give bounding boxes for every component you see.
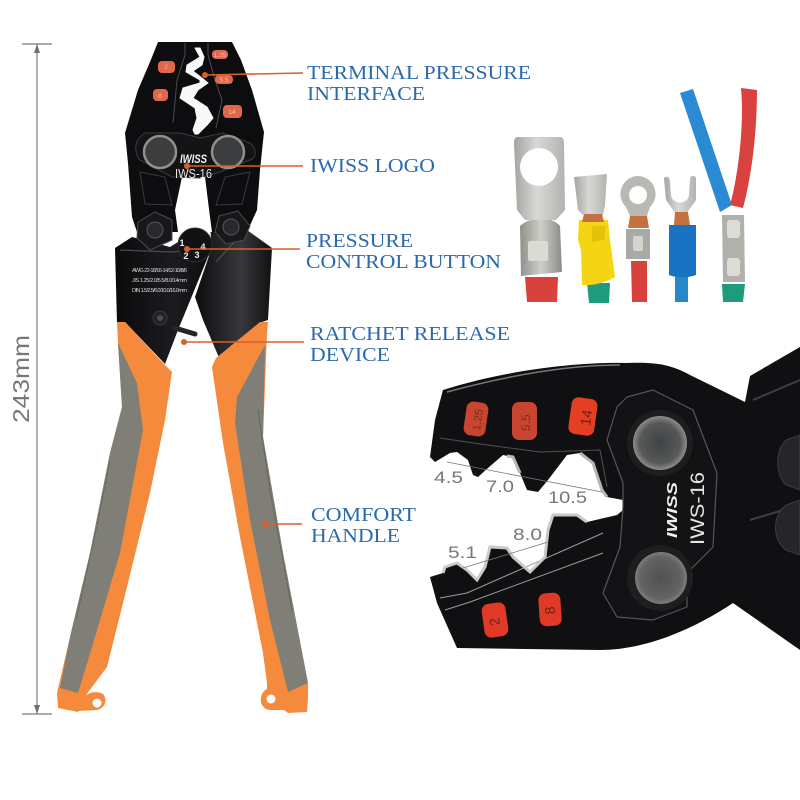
die size markers: 1.25	[214, 52, 227, 59]
pressure control dial: 4	[200, 242, 206, 252]
die size marker 8: 8	[541, 606, 558, 615]
callout: ratchet release device: RATCHET RELEASE	[310, 323, 510, 345]
pressure control dial: 1	[179, 238, 185, 248]
die size markers: 2	[164, 64, 168, 71]
specification text on lever: AWG 22-18/16-14/12-10/8/6	[132, 268, 187, 274]
brand marks: IWISS	[180, 154, 207, 166]
callout: IWISS logo	[184, 155, 435, 177]
crimping tool: full view	[57, 42, 308, 713]
die size markers	[153, 50, 242, 118]
callout: ratchet release device: DEVICE	[310, 344, 390, 366]
crimper head	[125, 42, 264, 232]
die size marker 1.25	[463, 401, 489, 437]
jaw die size labels: 8.0	[513, 525, 542, 544]
crimper head: IWS-16	[175, 167, 212, 181]
lower pivot bolt	[627, 545, 693, 611]
ratchet release device	[153, 311, 195, 334]
die size markers: 8	[158, 93, 162, 100]
rear toggle bolts	[776, 435, 800, 555]
jaw die size labels: 4.5	[434, 468, 463, 487]
terminal: blue insulated fork	[664, 176, 696, 302]
lower black levers	[115, 227, 272, 364]
toggle pins	[137, 211, 250, 250]
terminal: yellow insulated spade	[574, 174, 615, 303]
callout: IWISS logo: IWISS LOGO	[310, 155, 435, 177]
callout: ratchet release device	[181, 323, 510, 366]
specification text on lever: JIS 1.25/2.0/5.5/8.0/14mm	[132, 278, 187, 284]
callout: terminal pressure interface: INTERFACE	[307, 83, 425, 105]
jaw body and rear shell	[430, 347, 800, 650]
chrome tooth edges	[443, 515, 587, 580]
terminals and wires photo	[514, 88, 757, 303]
die size marker 14	[567, 396, 598, 437]
jaw die size labels: 7.0	[486, 477, 514, 496]
left handle	[57, 322, 172, 712]
specification text on lever: DIN 1.5/2.5/6.0/10.0/16.0mm	[132, 288, 187, 294]
die size marker 2: 2	[486, 617, 503, 627]
die size markers: 5.5	[219, 77, 229, 84]
right handle	[212, 322, 308, 713]
link plate	[603, 390, 717, 620]
crimper jaw close-up	[430, 347, 800, 650]
callout: comfort handle: COMFORT	[311, 504, 416, 526]
die size marker 2	[481, 601, 509, 639]
terminal: small ring with red wire	[620, 176, 656, 302]
terminal: butt splice with red, blue and green wires	[680, 88, 757, 302]
dimension value: 243mm	[8, 335, 34, 423]
callout: comfort handle: HANDLE	[311, 525, 400, 547]
jaw die size labels: 10.5	[548, 488, 587, 507]
callout: pressure control button: CONTROL BUTTON	[306, 251, 501, 273]
upper pivot bolt	[627, 410, 693, 476]
pressure control dial: 3	[194, 250, 200, 260]
pressure control dial: 2	[183, 251, 189, 261]
die size marker 5.5	[512, 402, 537, 440]
terminal: large ring lug with red wire	[514, 137, 565, 302]
jaw die size labels	[434, 462, 602, 568]
callout: pressure control button: PRESSURE	[306, 230, 413, 252]
callout: comfort handle	[262, 504, 416, 547]
die size marker 5.5: 5.5	[519, 414, 533, 431]
die size marker 14: 14	[577, 409, 595, 426]
jaw die size labels: 5.1	[448, 543, 477, 562]
opening between jaws	[180, 48, 213, 134]
rotated model text: IWS-16	[688, 472, 709, 545]
callout: terminal pressure interface	[202, 62, 531, 105]
pressure control dial	[178, 228, 212, 262]
die size marker 1.25: 1.25	[471, 409, 486, 431]
jaw edge highlight	[447, 365, 620, 392]
callout: terminal pressure interface: TERMINAL PRESSURE	[307, 62, 531, 84]
dimension line: tool length	[8, 44, 52, 714]
link plate	[136, 133, 255, 178]
rotated brand text: IWISS	[664, 482, 681, 538]
specification text on lever	[132, 268, 187, 294]
die size marker 8	[538, 592, 562, 627]
pivot bolts	[144, 136, 176, 168]
die size markers: 14	[228, 109, 236, 116]
callout: pressure control button	[184, 230, 501, 273]
